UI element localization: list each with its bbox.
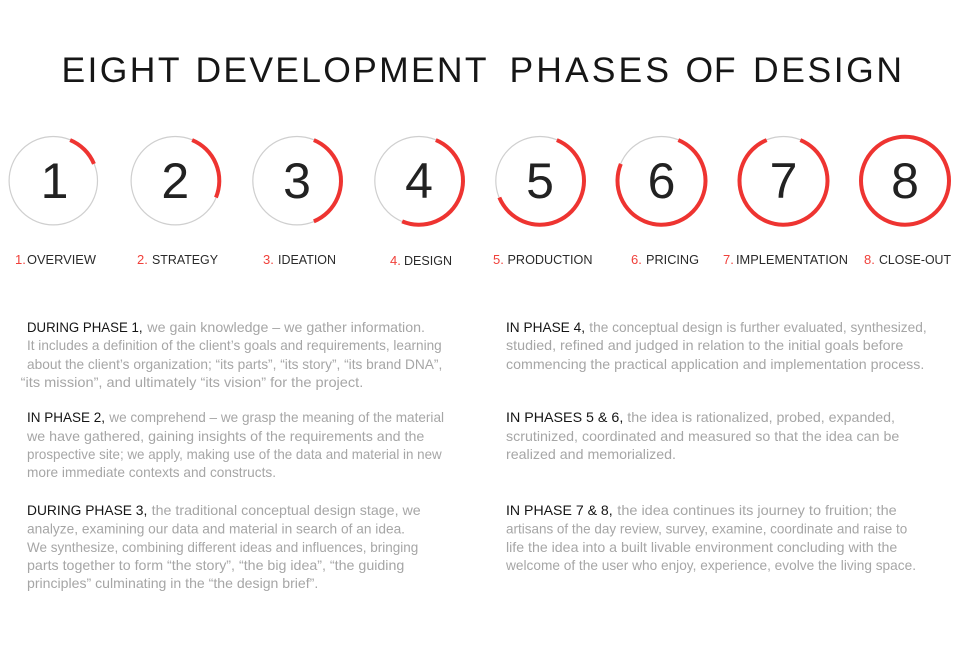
- label: overview: OVERVIEW: [27, 252, 97, 267]
- text block: phases 7 and 8: life the idea into a built livable environment concluding with the: [506, 539, 898, 555]
- text block: phase 3: principles” culminating in the “the design brief”.: [27, 575, 318, 591]
- label: close-out: 8.: [864, 252, 875, 267]
- phase 7 progress ring: 7: [770, 153, 797, 209]
- phase 2 progress ring: [118, 123, 233, 238]
- text block: phases 7 and 8: [505, 502, 916, 573]
- text block: phase 1: about the client’s organization; “its parts”, “its story”, “its brand DNA”,: [27, 356, 442, 372]
- text block: phase 3: the traditional conceptual design stage, we: [152, 502, 421, 518]
- label: design: 4.: [390, 253, 401, 268]
- text block: phases 7 and 8: the idea continues its journey to fruition; the: [617, 502, 897, 518]
- text block: phases 5 and 6: scrutinized, coordinated and measured so that the idea can be: [506, 428, 900, 444]
- label: overview: 1.: [15, 252, 26, 267]
- title: [62, 50, 902, 90]
- text block: phases 7 and 8: welcome of the user who enjoy, experience, evolve the living space.: [505, 557, 916, 573]
- panel: phase labels: [15, 252, 951, 268]
- text block: phase 2: more immediate contexts and constructs.: [27, 464, 276, 480]
- text block: phase 1: [21, 319, 442, 390]
- text block: phases 5 and 6: realized and memorialized.: [506, 446, 676, 462]
- text block: phases 7 and 8: artisans of the day review, survey, examine, coordinate and raise to: [506, 520, 907, 536]
- label: production: PRODUCTION: [508, 252, 592, 267]
- phase 1 progress ring: [0, 123, 111, 238]
- label: implementation: IMPLEMENTATION: [736, 252, 848, 267]
- text block: phase 4: the conceptual design is further evaluated, synthesized,: [589, 319, 927, 335]
- text block: phase 3: [27, 502, 421, 591]
- text block: phase 3: analyze, examining our data and material in search of an idea.: [27, 520, 405, 536]
- label: close-out: CLOSE-OUT: [879, 252, 951, 267]
- phase 3 progress ring: [240, 123, 354, 238]
- text block: phase 1: we gain knowledge – we gather information.: [146, 319, 425, 335]
- label: ideation: IDEATION: [278, 252, 336, 267]
- text block: phases 5 and 6: IN PHASES 5 & 6,: [506, 410, 623, 425]
- panel: progress circles: [0, 123, 949, 238]
- label: pricing: 6.: [631, 252, 642, 267]
- phase 4 progress ring: [362, 123, 476, 238]
- label: pricing: PRICING: [646, 252, 699, 267]
- text block: phase 4: [506, 319, 927, 372]
- text block: phase 3: DURING PHASE 3,: [27, 503, 147, 518]
- phase 6 progress ring: 6: [648, 153, 675, 209]
- text block: phase 2: we have gathered, gaining insights of the requirements and the: [26, 428, 425, 444]
- label: design: DESIGN: [404, 253, 452, 268]
- title: EIGHT: [62, 50, 180, 90]
- label: strategy: STRATEGY: [152, 252, 218, 267]
- phase 2 progress ring: 2: [161, 153, 189, 209]
- label: ideation: 3.: [263, 252, 274, 267]
- phase 8 progress ring: [861, 137, 949, 225]
- label: production: 5.: [493, 252, 504, 267]
- phase 6 progress ring: [604, 123, 719, 238]
- title: DEVELOPMENT: [196, 50, 486, 90]
- text block: phase 4: commencing the practical application and implementation process.: [506, 356, 924, 372]
- text block: phase 1: It includes a definition of the client’s goals and requirements, learning: [27, 337, 442, 353]
- text block: phase 1: DURING PHASE 1,: [27, 320, 142, 335]
- label: strategy: 2.: [137, 252, 148, 267]
- phase 3 progress ring: 3: [283, 153, 311, 209]
- title: PHASES: [510, 50, 669, 90]
- text block: phase 2: we comprehend – we grasp the meaning of the material: [108, 409, 444, 425]
- phase 1 progress ring: 1: [41, 153, 68, 209]
- text block: phases 5 and 6: [506, 409, 900, 462]
- text block: phase 4: studied, refined and judged in relation to the initial goals before: [506, 337, 904, 353]
- text block: phases 5 and 6: the idea is rationalized, probed, expanded,: [627, 409, 895, 425]
- phase 8 progress ring: 8: [891, 153, 919, 209]
- phase 5 progress ring: [483, 123, 597, 238]
- text block: phase 1: “its mission”, and ultimately “its vision” for the project.: [21, 374, 363, 390]
- text block: phases 7 and 8: IN PHASE 7 & 8,: [506, 503, 613, 518]
- text block: phase 4: IN PHASE 4,: [506, 320, 585, 335]
- text block: phase 2: prospective site; we apply, making use of the data and material in new: [27, 446, 443, 462]
- text block: phase 2: [26, 409, 444, 480]
- title: DESIGN: [753, 50, 902, 90]
- phase 5 progress ring: 5: [526, 153, 554, 209]
- text block: phase 3: We synthesize, combining different ideas and influences, bringing: [27, 539, 418, 555]
- phase 7 progress ring: [726, 123, 841, 238]
- title: OF: [686, 50, 736, 90]
- text block: phase 2: IN PHASE 2,: [27, 410, 105, 425]
- phase 4 progress ring: 4: [405, 153, 433, 209]
- label: implementation: 7.: [723, 252, 734, 267]
- text block: phase 3: parts together to form “the story”, “the big idea”, “the guiding: [27, 557, 404, 573]
